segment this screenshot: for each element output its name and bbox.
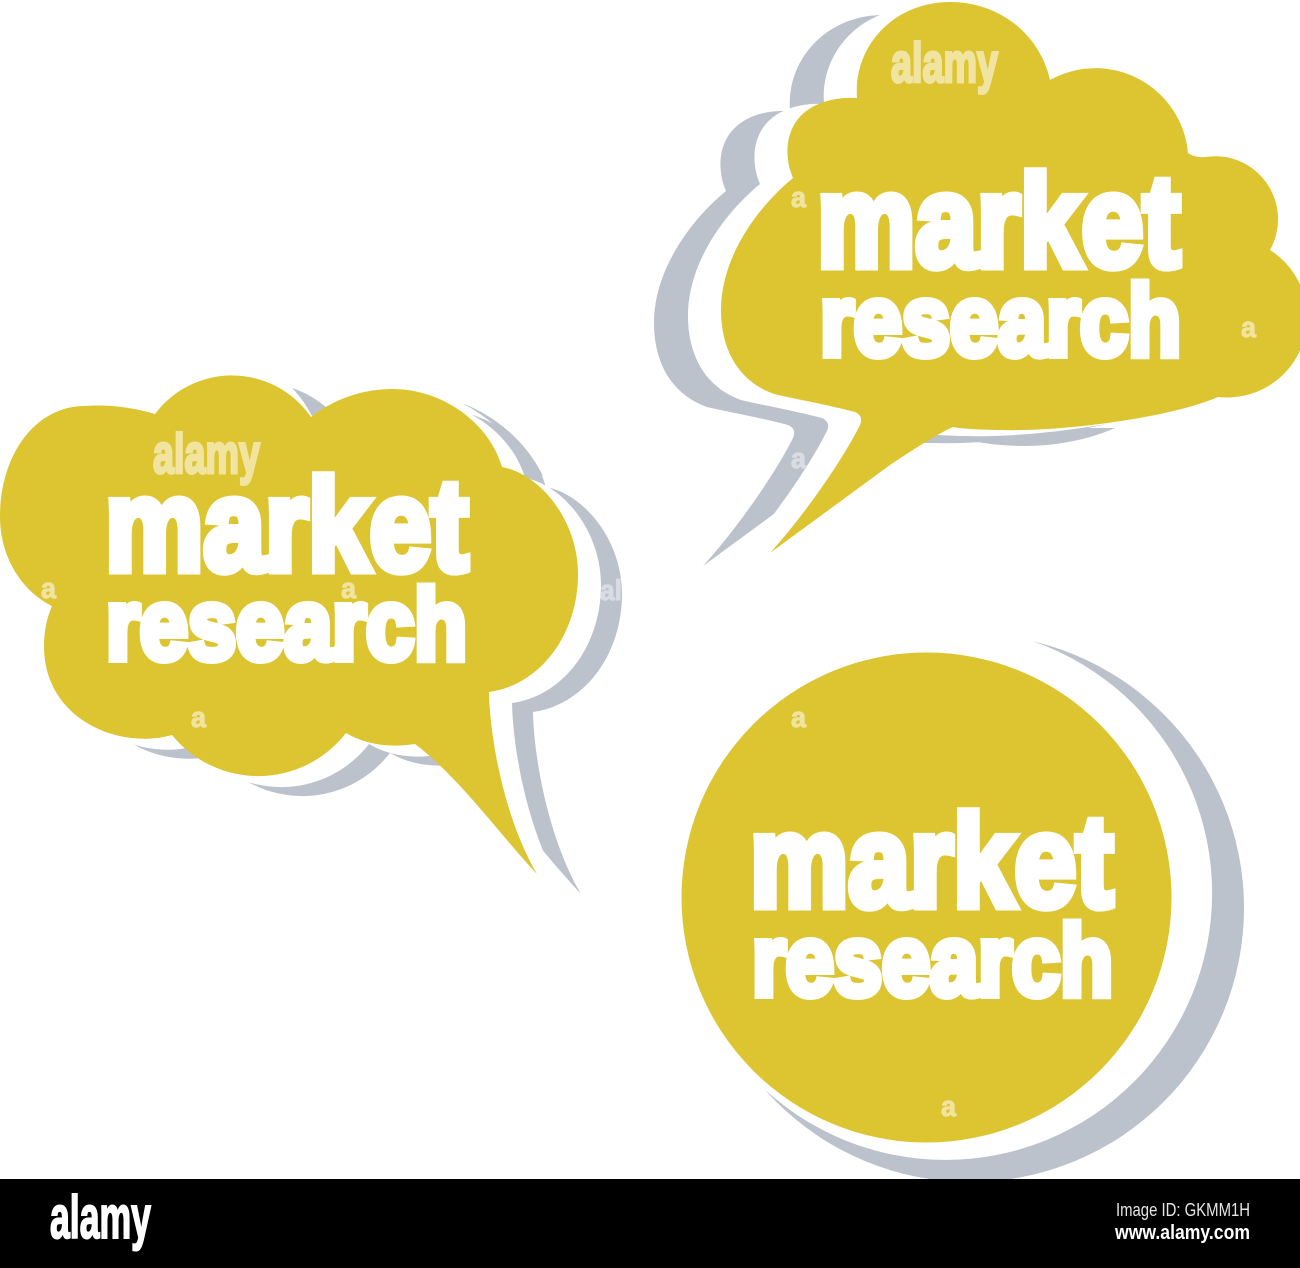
watermark letters circle (791, 702, 957, 1123)
watermark letters circle: a (941, 1091, 957, 1123)
watermark letters left: a (341, 573, 357, 605)
watermark letters left: a (41, 573, 57, 605)
badge: circle sticker (679, 626, 1244, 1182)
bubble: left cloud (0, 375, 622, 894)
footer url: www.alamy.com (1114, 1222, 1250, 1244)
heading: research left: research (106, 569, 467, 681)
bubble: top right cloud (654, 2, 1300, 566)
footer logo: alamy: alamy (50, 1184, 151, 1251)
watermark letters left (41, 573, 622, 734)
footer bar (0, 1179, 1300, 1268)
heading: market left: market (105, 452, 468, 598)
watermark letters: a (1241, 312, 1257, 344)
watermark letters left: al (600, 575, 622, 607)
heading: market circle: market (750, 788, 1113, 934)
watermark: alamy left: alamy (153, 422, 260, 485)
footer image id: Image ID: GKMM1H (1116, 1200, 1250, 1220)
heading: research: research (820, 265, 1181, 377)
heading: research circle: research (752, 905, 1113, 1017)
watermark letters left: a (191, 702, 207, 734)
watermark: alamy top: alamy (891, 31, 998, 94)
watermark letters circle: a (791, 702, 807, 734)
watermark letters: a (791, 182, 807, 214)
heading: market: market (817, 148, 1180, 294)
watermark letters: a (791, 443, 807, 475)
watermark letters (791, 182, 1257, 475)
